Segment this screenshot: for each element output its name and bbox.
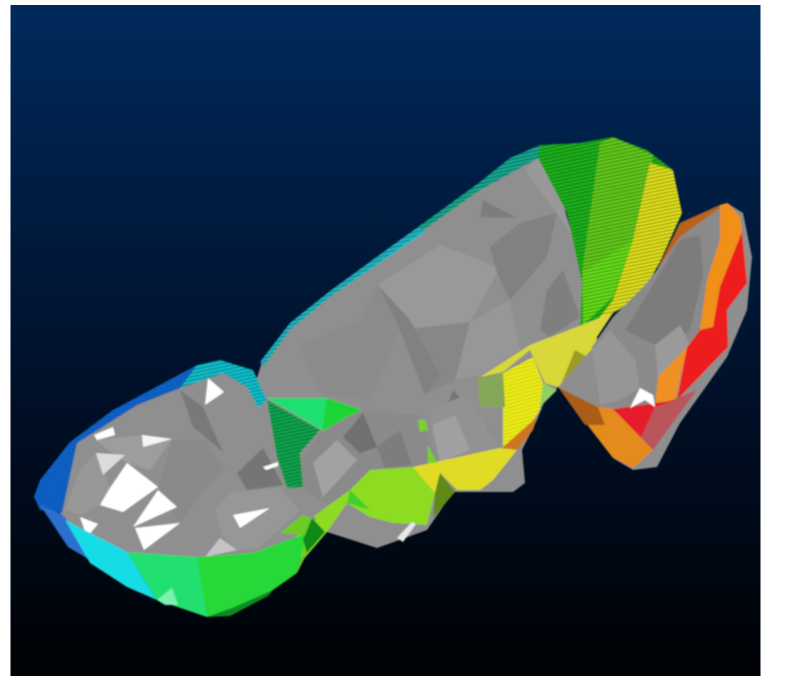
panel: right lobe	[558, 203, 752, 470]
band: red	[677, 232, 747, 400]
band: mid yellow strip	[477, 312, 613, 450]
band: red bottom	[613, 400, 677, 447]
panel: middle rock facets	[300, 390, 500, 505]
band: lime middle	[280, 420, 517, 560]
icons: white facets	[80, 378, 278, 557]
band: lower cyan and green sweep	[65, 515, 325, 617]
band: pale red	[637, 390, 697, 450]
rim: teal dotted top edge	[260, 145, 540, 366]
band: orange upper	[700, 203, 742, 330]
panel: left lobe grey	[60, 373, 316, 575]
band: blue left rim	[34, 365, 197, 560]
facet: white sliver	[397, 522, 416, 542]
band: yellow middle	[413, 448, 517, 493]
band: orange bottom	[558, 387, 653, 468]
rim: orange top edge	[657, 205, 720, 270]
icon: white facet	[630, 388, 655, 408]
band: top green and yellow shell	[538, 137, 682, 403]
band: orange lower	[655, 347, 687, 407]
band: green patch behind left lobe	[267, 398, 362, 488]
panel: main grey body	[250, 158, 582, 548]
mesh model	[34, 137, 752, 617]
band: cyan top rim	[180, 360, 267, 408]
